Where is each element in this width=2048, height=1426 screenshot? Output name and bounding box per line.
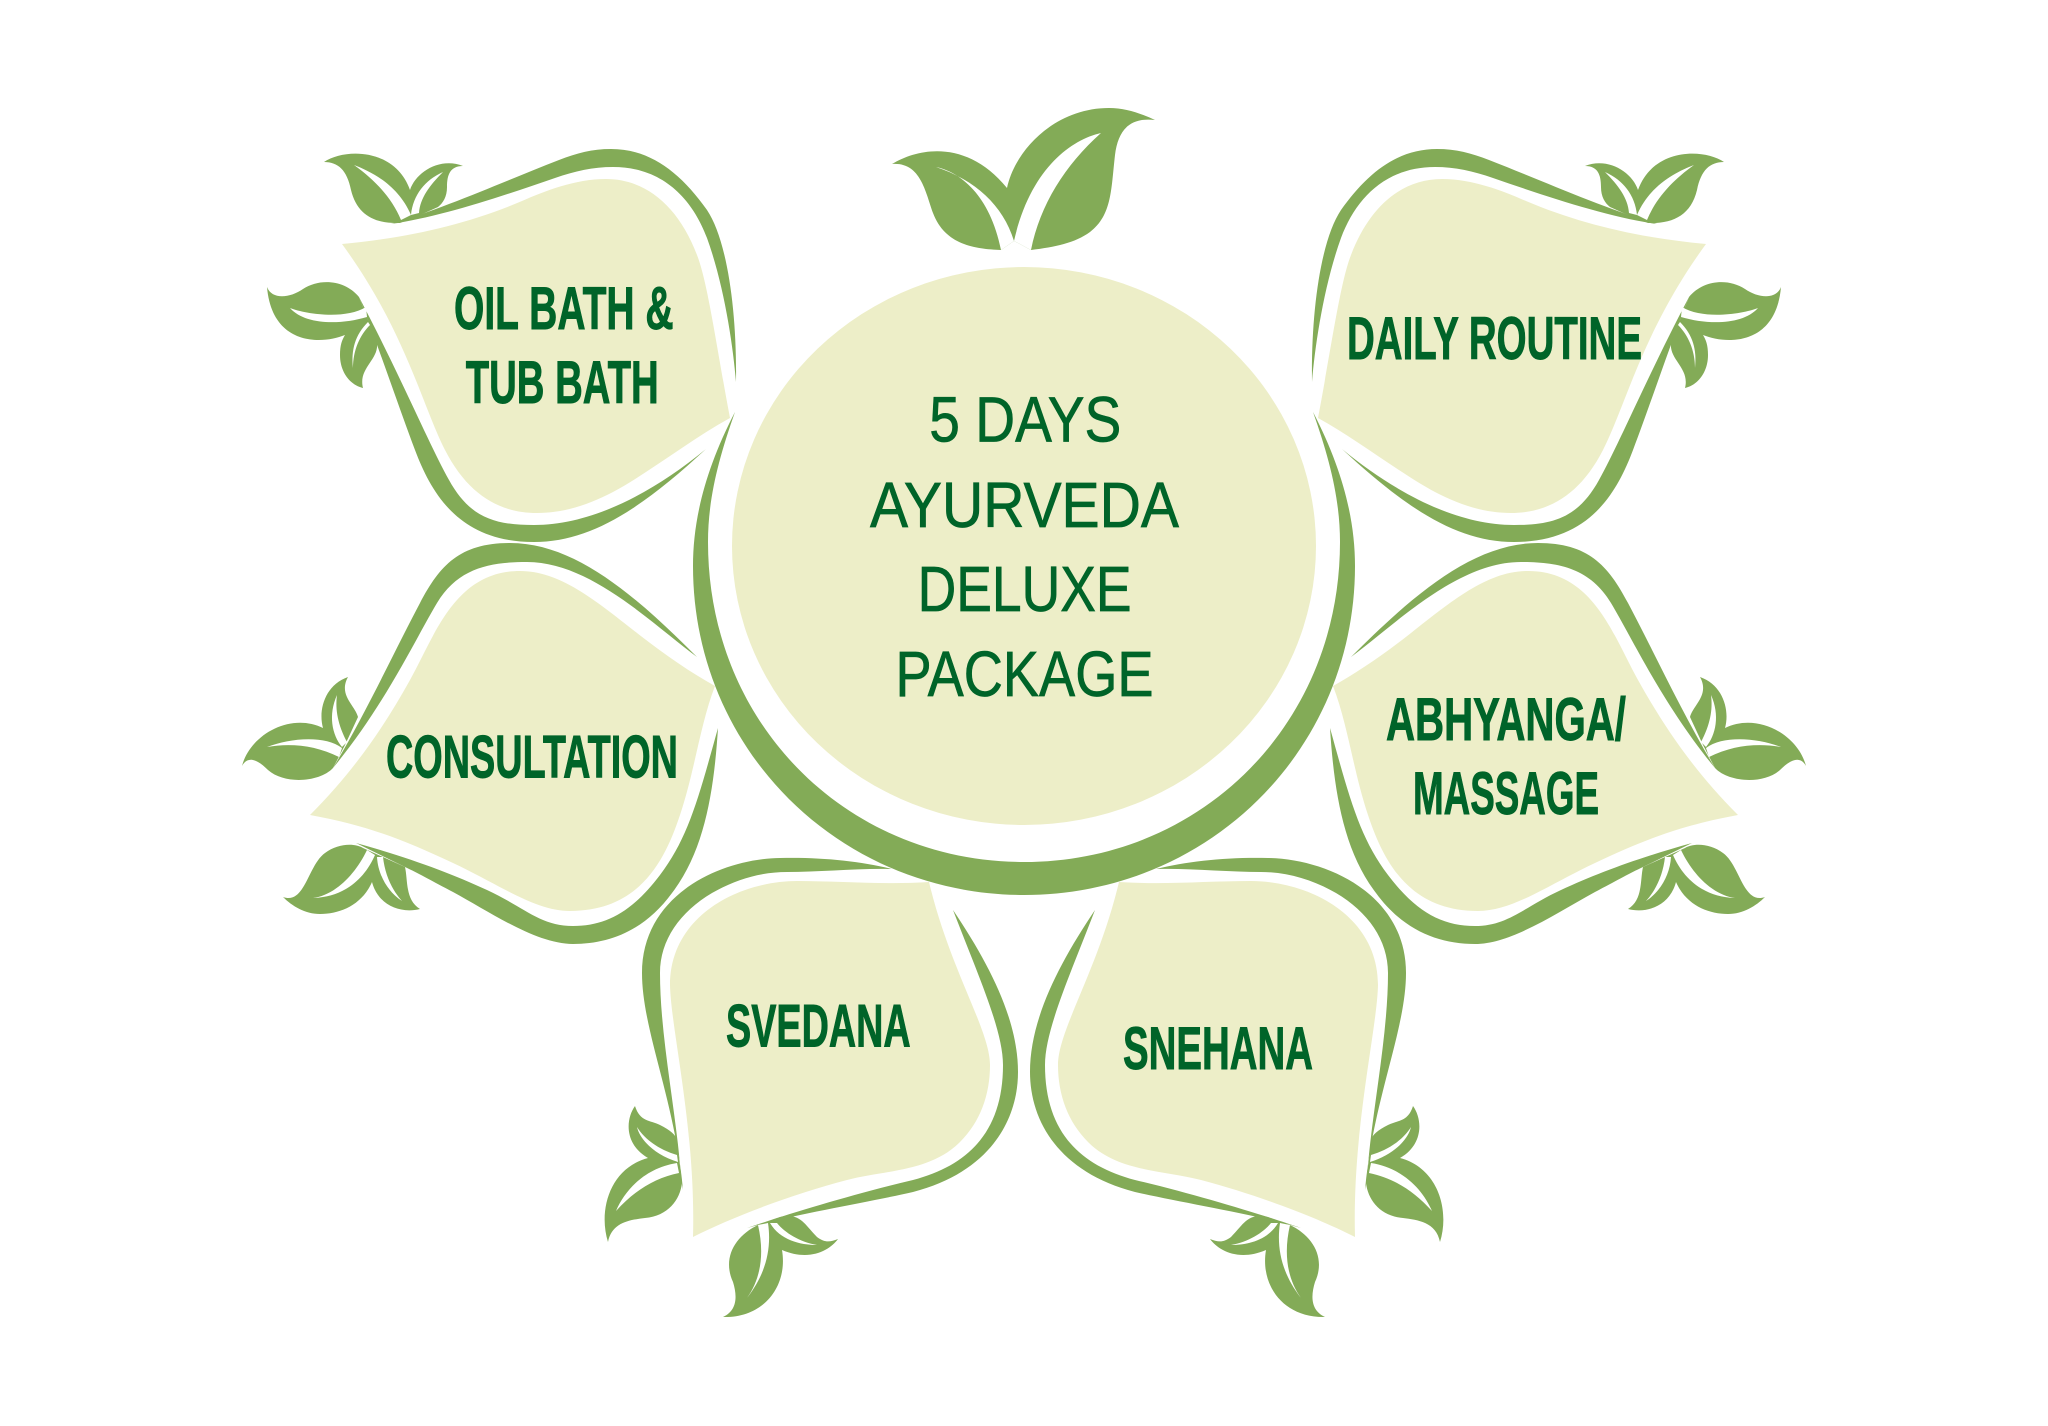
icon: abhyanga upper leaves (1690, 677, 1806, 780)
panel: oil bath and tub bath (267, 149, 736, 542)
label: daily routine: DAILY ROUTINE (1347, 305, 1642, 372)
panel: daily routine (1312, 149, 1781, 542)
icon: top leaves (892, 108, 1155, 250)
label: tub bath: TUB BATH (466, 349, 659, 416)
icon: abhyanga lower leaves (1628, 845, 1765, 914)
panel: svedana (605, 858, 1018, 1317)
label: snehana: SNEHANA (1123, 1015, 1313, 1082)
icon: svedana bottom leaves (723, 1216, 838, 1317)
centre cream ellipse (732, 267, 1316, 825)
icon: svedana left leaves (605, 1106, 682, 1242)
oil bath leaf shape (342, 149, 736, 542)
panel: centre circle (693, 108, 1355, 895)
panel: abhyanga massage (1330, 543, 1806, 944)
icon: snehana bottom leaves (1210, 1216, 1325, 1317)
svedana leaf shape (642, 858, 1018, 1237)
label: massage: MASSAGE (1413, 760, 1599, 827)
centre title: AYURVEDA (870, 469, 1179, 541)
label: consultation: CONSULTATION (386, 724, 678, 791)
panel: consultation (242, 543, 718, 944)
daily routine leaf shape (1312, 149, 1706, 542)
centre title (870, 384, 1179, 710)
label: svedana: SVEDANA (726, 993, 911, 1060)
icon: consultation lower leaves (283, 845, 420, 914)
label: abhyanga: ABHYANGA/ (1386, 686, 1626, 753)
abhyanga leaf shape (1330, 543, 1738, 944)
icon: daily routine top leaves (1585, 154, 1724, 223)
snehana leaf shape (1030, 858, 1406, 1237)
icon: oil bath side leaves (267, 282, 377, 388)
icon: consultation upper leaves (242, 677, 358, 780)
icon: oil bath top leaves (324, 154, 463, 223)
label: oil bath: OIL BATH & (454, 275, 674, 342)
centre green crescent (693, 412, 1355, 895)
consultation leaf shape (310, 543, 718, 944)
panel: snehana (1030, 858, 1443, 1317)
icon: snehana right leaves (1366, 1106, 1443, 1242)
centre title: DELUXE (918, 553, 1132, 625)
icon: daily routine side leaves (1671, 282, 1781, 388)
centre title: PACKAGE (896, 638, 1154, 710)
centre title: 5 DAYS (929, 384, 1121, 456)
